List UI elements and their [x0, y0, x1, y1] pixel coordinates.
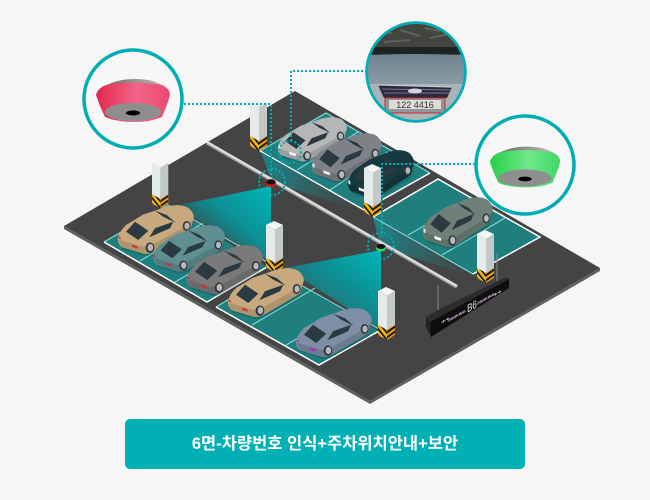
- pillar 5: [359, 164, 384, 221]
- car: blue grey: [296, 308, 372, 359]
- centre divider rail: [207, 142, 457, 287]
- hanging guidance sign: ➔➔: [493, 289, 502, 299]
- parking zone: right: [373, 179, 540, 274]
- caption banner: 6면-차량번호 인식+주차위치안내+보안: [192, 435, 458, 453]
- callout circle: red sensor: [84, 50, 182, 148]
- hanging guidance sign: PARKING: [477, 291, 495, 306]
- pillar 4: [373, 287, 398, 344]
- camera device: red: [266, 179, 276, 187]
- hanging guidance sign: B6: [467, 298, 477, 316]
- hanging guidance sign: PARKING: [448, 308, 466, 323]
- car: teal: [153, 225, 225, 273]
- car: dark green SUV: [348, 150, 414, 200]
- parking zone: lower middle: [216, 271, 379, 365]
- pillar 3: [261, 221, 286, 276]
- callout circle: licence plate camera view: 122 4416: [396, 100, 434, 110]
- floor slab: [64, 91, 600, 404]
- dotted leader lines: [184, 71, 475, 259]
- camera device: green: [376, 244, 386, 252]
- camera view cone: left lot: [170, 186, 271, 260]
- car: tan 2: [228, 268, 304, 319]
- pillar 6: [472, 230, 497, 287]
- car: grey: [187, 246, 263, 296]
- hanging guidance sign: ➔➔: [441, 316, 450, 326]
- hanging guidance sign: [426, 253, 509, 337]
- pillar 2: [147, 159, 171, 212]
- parking zone: lower left: [104, 205, 267, 302]
- camera view cone: middle lot: [285, 250, 381, 328]
- callout circle: licence plate camera view: [366, 22, 466, 124]
- car: sage: [423, 198, 493, 249]
- car: silver: [278, 117, 347, 163]
- caption banner: [125, 419, 525, 469]
- callout circle: green sensor: [476, 116, 574, 214]
- pillar 1: [245, 98, 270, 155]
- parking zone: upper: [260, 113, 430, 210]
- parking lot scene: [64, 21, 600, 404]
- car: tan 1: [118, 206, 194, 256]
- car: dark grey: [312, 133, 382, 183]
- camera view cone: upper bay: [261, 152, 364, 211]
- camera view cone: right bay: [373, 218, 472, 276]
